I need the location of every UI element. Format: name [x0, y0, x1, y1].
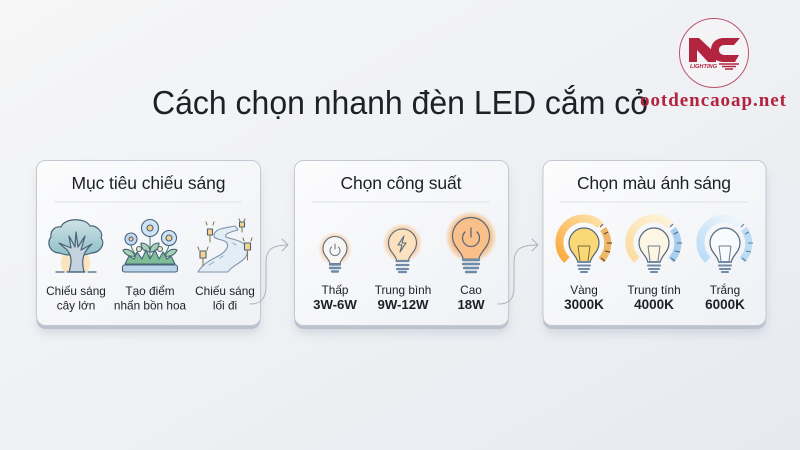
label: thấp: 3W-6W — [313, 297, 357, 312]
icon: tree — [49, 220, 103, 272]
icon: warm bulb 3000K — [559, 218, 612, 272]
arrow: target to power — [250, 239, 288, 304]
label: lối đi: lối đi — [213, 298, 237, 312]
logo: NC Lighting — [680, 18, 748, 88]
icon: flower bed — [122, 220, 178, 272]
heading: mục tiêu: Mục tiêu chiếu sáng — [72, 173, 226, 193]
label: bồn hoa: nhấn bồn hoa — [114, 298, 187, 312]
panel: chọn công suất — [294, 160, 508, 333]
icon: medium power bulb — [382, 223, 422, 272]
icon: low power bulb — [318, 232, 352, 272]
icon: pathway with lamps — [198, 219, 252, 272]
logo: NC Lighting: LIGHTING — [690, 64, 718, 70]
icon: white bulb 6000K — [700, 218, 753, 272]
label: lối đi: Chiếu sáng — [195, 284, 255, 298]
label: thấp: Thấp — [322, 283, 348, 297]
label: trung tính: Trung tính — [627, 283, 681, 297]
label: cây lớn: cây lớn — [57, 298, 95, 312]
label: trung bình: Trung bình — [375, 283, 431, 297]
panel: chọn màu ánh sáng — [543, 160, 766, 333]
label: trung tính: 4000K — [634, 297, 674, 312]
label: trung bình: 9W-12W — [377, 297, 429, 312]
panel: mục tiêu chiếu sáng — [36, 160, 260, 333]
label: trắng: Trắng — [710, 283, 740, 297]
label: bồn hoa: Tạo điểm — [125, 284, 175, 298]
arrow: power to colour — [498, 239, 538, 304]
icon: neutral bulb 4000K — [629, 218, 682, 272]
label: cao: 18W — [457, 297, 485, 312]
icon: high power bulb — [445, 211, 497, 272]
label: vàng: Vàng — [570, 283, 598, 297]
label: cao: Cao — [460, 283, 482, 297]
label: cây lớn: Chiếu sáng — [46, 284, 106, 298]
label: trắng: 6000K — [705, 297, 745, 312]
title: Cách chọn nhanh đèn LED cắm cỏ — [152, 84, 648, 122]
heading: màu ánh sáng: Chọn màu ánh sáng — [577, 173, 731, 193]
heading: công suất: Chọn công suất — [340, 173, 462, 193]
watermark: website: ootdencaoap.net — [640, 90, 787, 111]
label: vàng: 3000K — [564, 297, 604, 312]
